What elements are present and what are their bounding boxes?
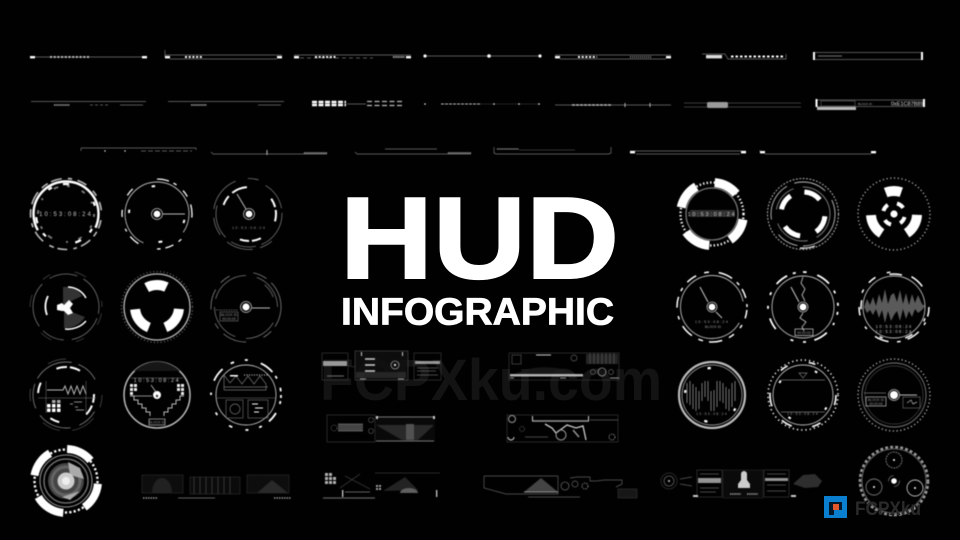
- bar row 2 item 7: 0xE1C87B89: [891, 102, 923, 108]
- gauge R7: bars dial: [679, 362, 745, 428]
- gauge R1: blocks with time: [680, 182, 744, 246]
- panels: [142, 351, 822, 498]
- bar row 1 item 4: [423, 54, 542, 58]
- brand name: FCPXku: [855, 499, 921, 520]
- gauge L8: stepped dial: [124, 362, 190, 428]
- gauge L3: needle dial: [214, 178, 284, 250]
- gauge L1: time ring: 10:53:08:24: [39, 212, 93, 218]
- gauge R5: needle with jagged line: 00:00:00: [797, 331, 811, 335]
- gauge R8: dotted dial: 10:53:08:24: [787, 412, 819, 416]
- bar row 2 item 3: chevrons: [312, 102, 402, 106]
- gauge R4: needle dial with time: 10:53:08:24: [695, 319, 729, 324]
- gauge R4: needle dial with time: [677, 272, 747, 342]
- gauge R1: blocks with time: 10:53:08:24: [688, 212, 736, 218]
- gauge R2: segmented rings: [768, 178, 838, 250]
- gauge L2: needle dial: [122, 179, 192, 249]
- gauge R4: needle dial with time: BLOCK ID: [705, 325, 722, 329]
- panel P6: mountain panel: [323, 473, 440, 498]
- panel P7: line panel: [484, 476, 637, 498]
- panel P5: dim screens: [142, 475, 291, 498]
- logo: brand mark and dim name: [824, 496, 921, 520]
- gauge R7: bars dial: 10:53:08:24: [696, 412, 728, 416]
- bar row 2 item 7: [816, 99, 925, 110]
- panel P1: three screens: [322, 351, 441, 380]
- gauge L10: blocks with core: [34, 449, 98, 513]
- gauge R6: waveform dial: 10:53:08:24: [876, 329, 912, 334]
- gauge L9: chart dial: [211, 360, 281, 430]
- bar row 3 item 2: [211, 150, 327, 155]
- gauge R3: dotted with arcs: [858, 178, 930, 250]
- bar row 3 item 5: [630, 151, 746, 154]
- bar row 1 item 7: [813, 52, 923, 60]
- gauge R6: waveform dial: [859, 272, 929, 342]
- gauge R10: three small dials: [860, 447, 928, 515]
- bar row 1 item 1: [30, 56, 147, 58]
- bar row 1 item 5: [555, 55, 671, 59]
- bar row 2 item 5: [555, 103, 671, 107]
- gauge R5: needle with jagged line: [768, 272, 838, 342]
- bar row 2 item 4: [424, 103, 540, 105]
- gauge L1: time ring: [30, 178, 102, 250]
- bar row 2 item 2: [168, 102, 284, 105]
- panel P3: screen and glow: [327, 415, 435, 442]
- gauge L8: stepped dial: BLOCK ID: [149, 420, 166, 424]
- bar row 1 item 6: [702, 54, 786, 59]
- gauge R6: waveform dial: 10:53:08:24: [876, 324, 912, 329]
- bar row 2 item 6: [684, 102, 801, 108]
- bar row 3 item 1: [81, 148, 196, 152]
- bar row 2 item 1: [31, 102, 146, 105]
- left circle gauges: [30, 178, 284, 513]
- gauge L4: trefoil: [30, 271, 102, 343]
- gauge L6: readout dial: [211, 272, 281, 342]
- gauge L6: readout dial: 00:00:00: [222, 317, 236, 321]
- bar row 3 item 3: [355, 149, 471, 154]
- bar row 1 item 3: [294, 55, 411, 58]
- panel P8: figure panel: [661, 470, 822, 498]
- top bars: [30, 50, 925, 155]
- icon: blue square logo: [824, 496, 847, 518]
- bar row 3 item 4: [494, 147, 611, 154]
- bar row 2 item 7: BLOCK ID: [858, 102, 873, 106]
- gauge R8: dotted dial: [768, 360, 838, 430]
- gauge L8: stepped dial: 10:53:08:24: [134, 378, 180, 384]
- gauge L7: zigzag and grid: [30, 359, 102, 431]
- gauge L6: readout dial: BLOCK ID: [221, 313, 238, 317]
- panel P2: map and grid: [509, 353, 619, 380]
- gauge R9: dot and readouts: BLOCK ID: [868, 398, 885, 402]
- gauge R9: dot and readouts: 00:00:00: [869, 402, 883, 406]
- gauge L3: needle dial: 10:53:08:24: [232, 225, 266, 230]
- subtitle: INFOGRAPHIC: INFOGRAPHIC: [341, 292, 614, 334]
- title: HUD: HUD: [340, 173, 619, 303]
- panel P4: world map: [507, 415, 618, 442]
- bar row 3 item 6: [760, 150, 876, 154]
- watermark: FCPXku.com: FCPXku.com: [320, 348, 662, 413]
- bar row 1 item 2: [165, 50, 282, 59]
- right circle gauges: [677, 178, 930, 515]
- gauge L5: three arcs: [122, 272, 192, 342]
- gauge R9: dot and readouts: [858, 359, 930, 431]
